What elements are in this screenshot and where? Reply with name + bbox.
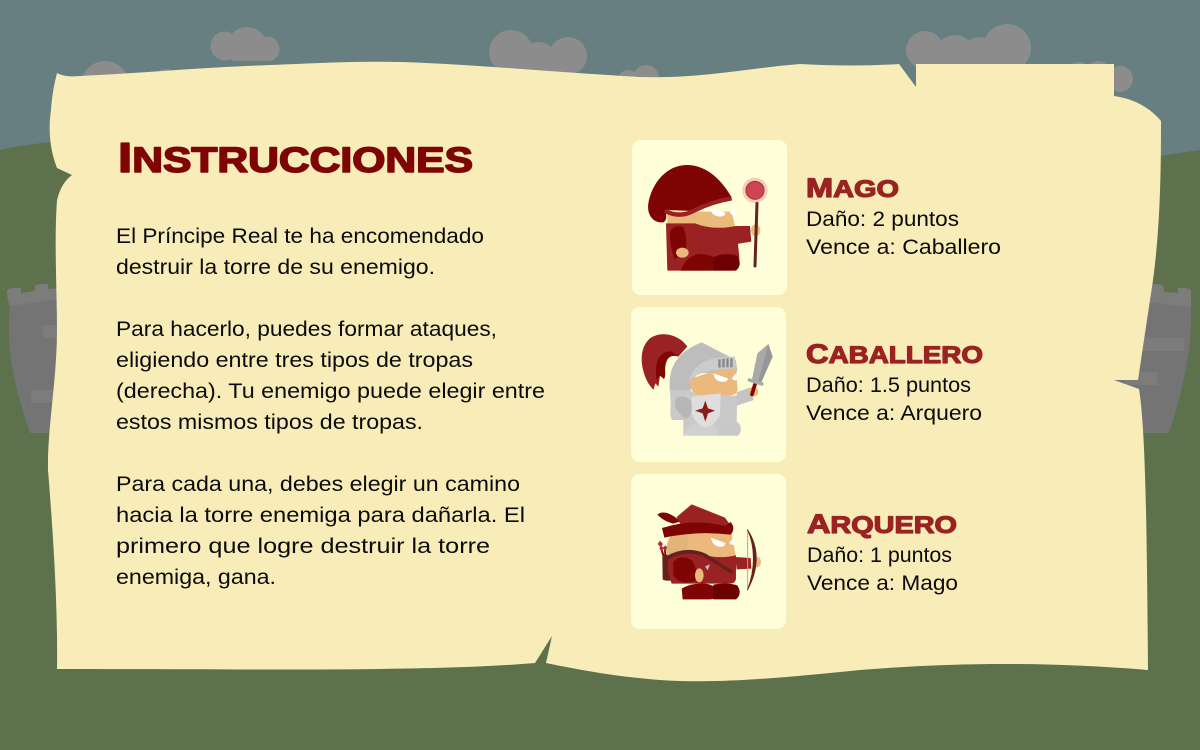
label: caballero: Vence a: Arquero <box>806 402 982 425</box>
card: mago <box>632 140 787 295</box>
card: caballero <box>631 307 786 462</box>
instructions text: paragraph 2: estos mismos tipos de tropas. <box>116 411 423 434</box>
instructions text: paragraph 1: destruir la torre de su enemigo. <box>116 256 435 279</box>
icon: knight <box>642 334 773 436</box>
title: INSTRUCCIONES <box>118 134 473 181</box>
instructions text: paragraph 3: hacia la torre enemiga para dañarla. El <box>116 504 525 527</box>
label: mago <box>806 173 1001 259</box>
label: arquero: Daño: 1 puntos <box>807 544 952 567</box>
clouds <box>83 24 1133 92</box>
instructions text: paragraph 3: Para cada una, debes elegir un camino <box>116 473 520 496</box>
instructions text: paragraph 2: (derecha). Tu enemigo puede elegir entre <box>116 380 545 403</box>
label: arquero: Vence a: Mago <box>807 572 958 595</box>
card: arquero <box>631 474 786 629</box>
instructions text: paragraph 3: primero que logre destruir la torre <box>116 535 490 558</box>
instructions text: paragraph 2 <box>116 318 545 434</box>
right tower <box>1110 284 1191 433</box>
label: caballero: Daño: 1.5 puntos <box>806 374 971 397</box>
label: arquero <box>807 509 958 595</box>
label: mago: Vence a: Caballero <box>806 236 1001 259</box>
instructions text: paragraph 2: eligiendo entre tres tipos de tropas <box>116 349 473 372</box>
label: mago: MAGO <box>806 173 899 203</box>
label: caballero: CABALLERO <box>806 339 983 369</box>
icon: archer <box>657 504 761 599</box>
label: caballero <box>806 339 983 425</box>
instructions text: paragraph 3: enemiga, gana. <box>116 566 276 589</box>
instructions text: paragraph 2: Para hacerlo, puedes formar ataques, <box>116 318 497 341</box>
parchment panel <box>48 62 1161 681</box>
icon: wizard <box>648 165 768 271</box>
label: mago: Daño: 2 puntos <box>806 208 959 231</box>
instructions text: paragraph 3 <box>116 473 525 589</box>
instructions text: paragraph 1 <box>116 225 484 279</box>
label: arquero: ARQUERO <box>807 509 957 539</box>
left tower <box>7 284 63 433</box>
instructions text: paragraph 1: El Príncipe Real te ha encomendado <box>116 225 484 248</box>
